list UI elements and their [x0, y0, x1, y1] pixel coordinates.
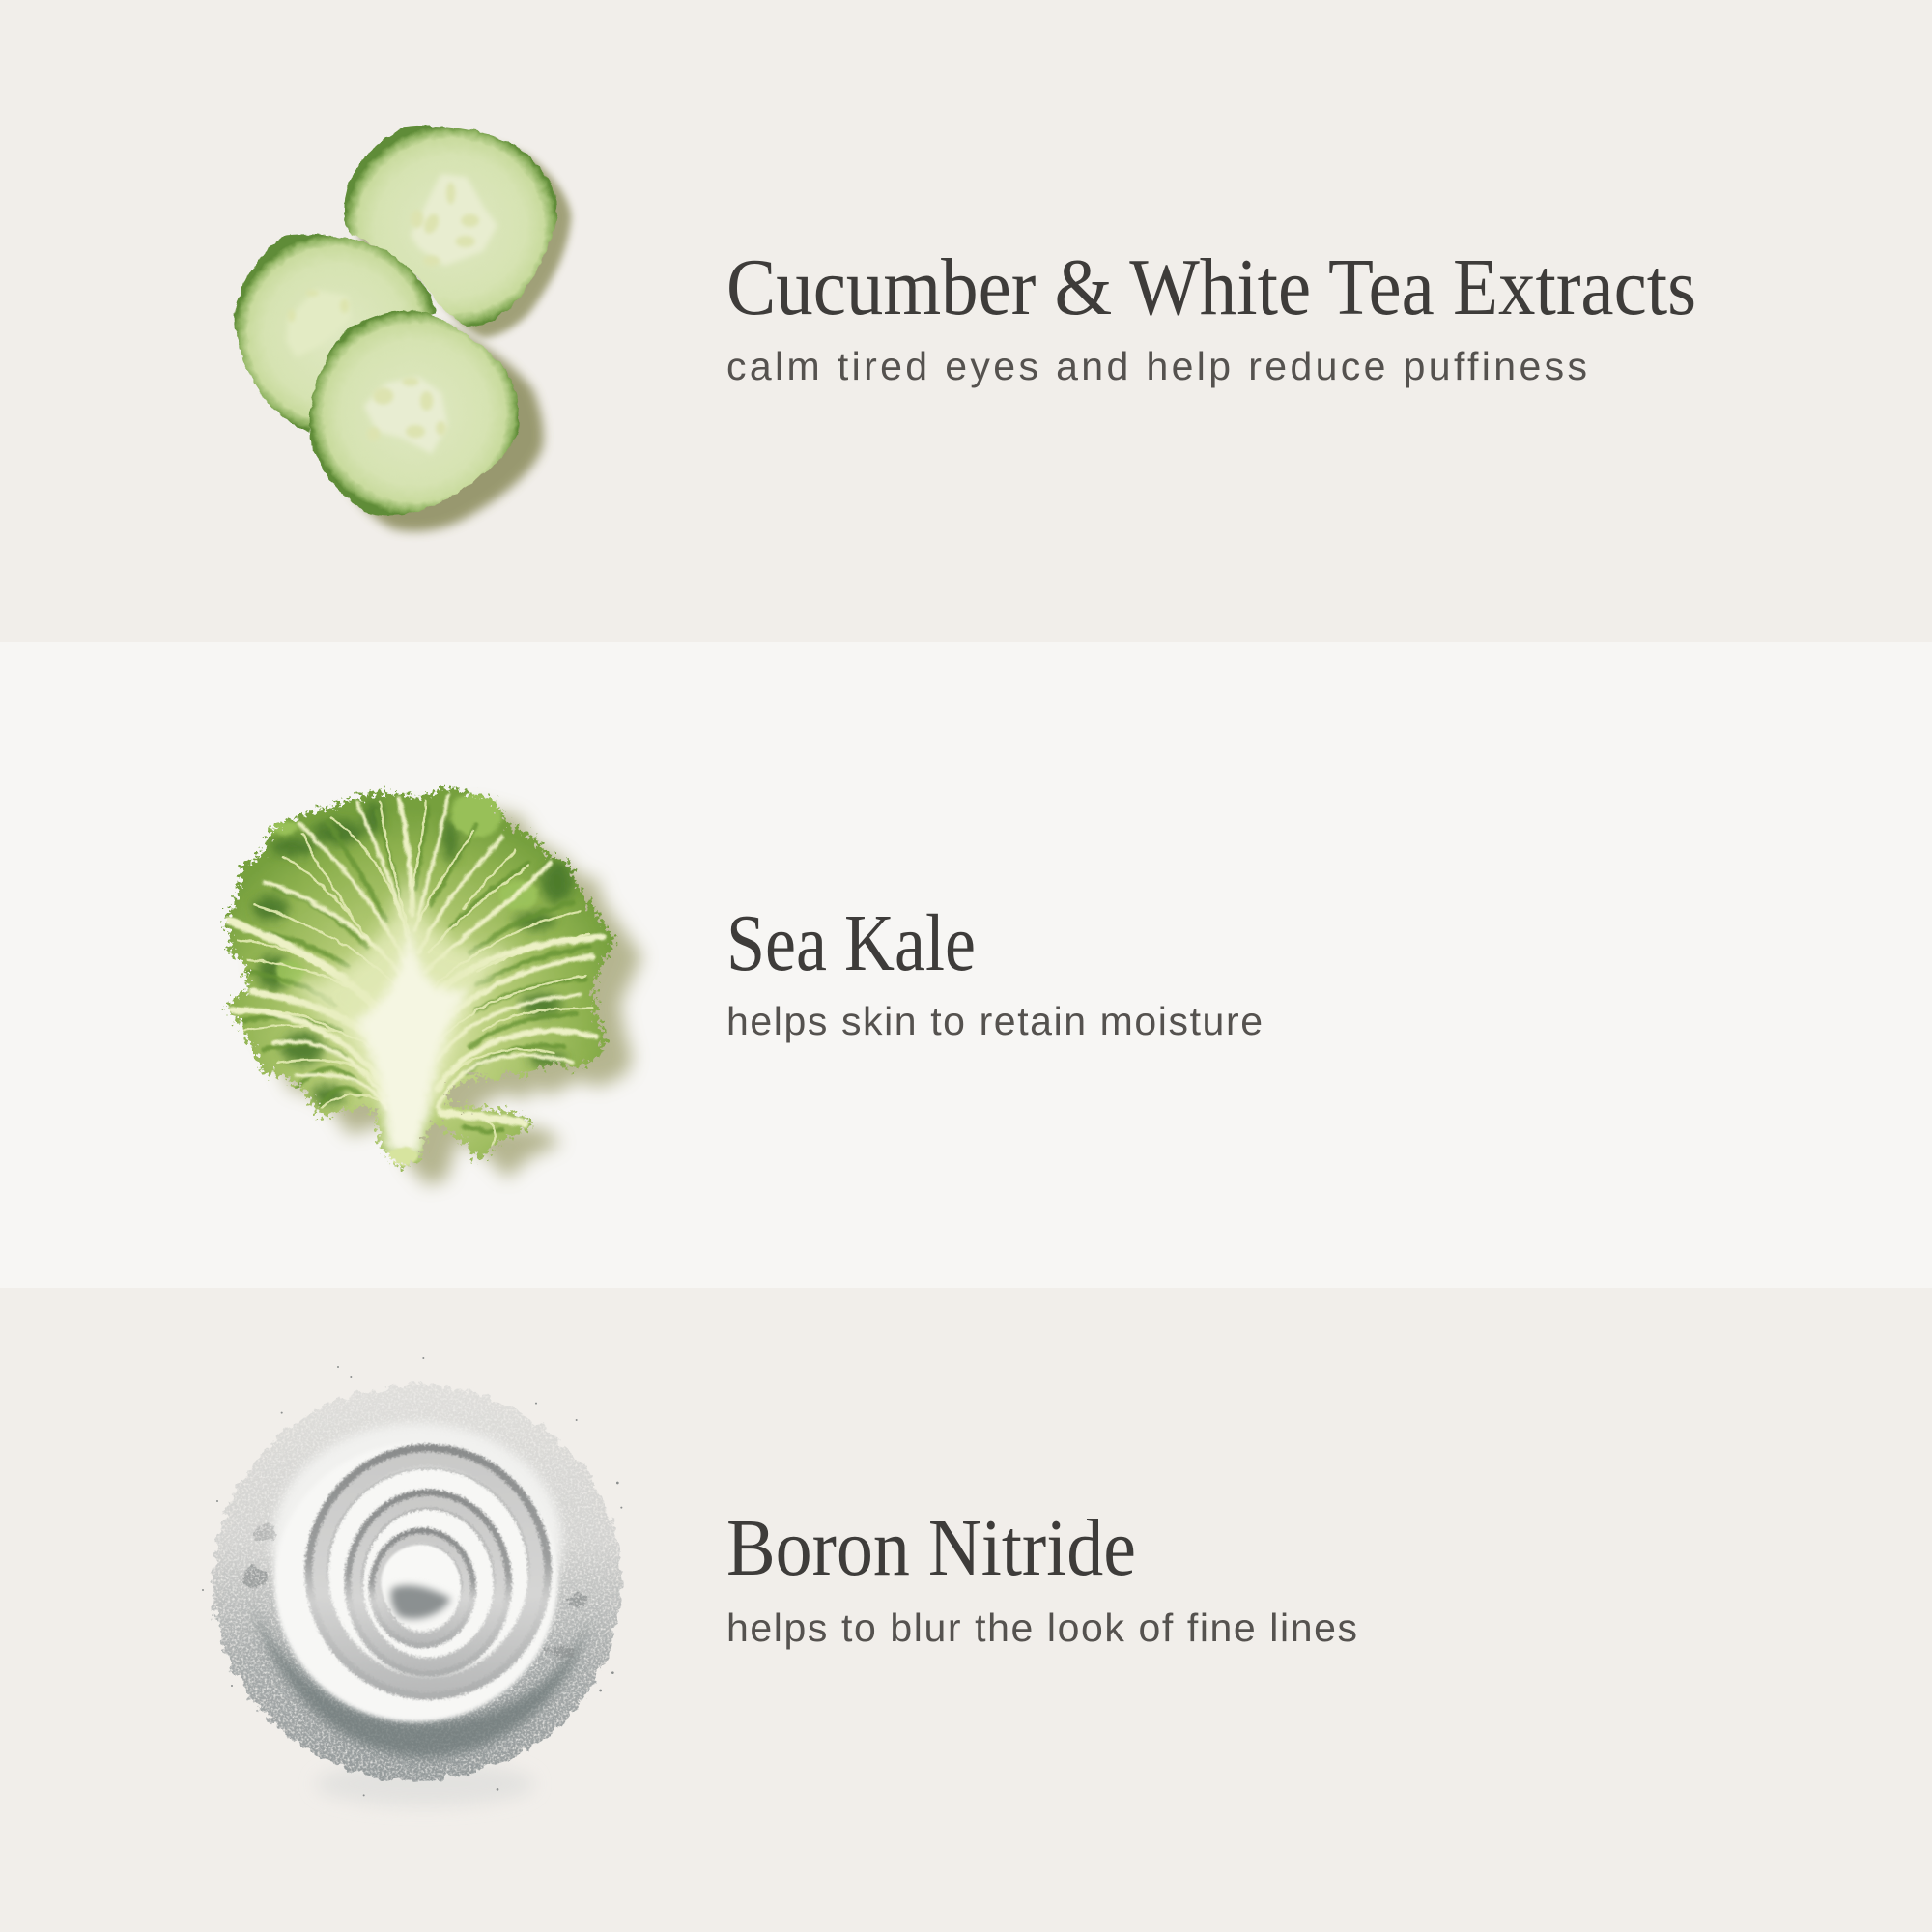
panel: sea kale [0, 642, 1932, 1288]
concentric ripples [308, 1448, 548, 1696]
smooth inner plate [272, 1423, 562, 1721]
seeds: middle slice [287, 290, 351, 357]
fine veins [239, 802, 592, 1147]
text: benefit: calm tired eyes and help reduce puffiness [726, 344, 1587, 388]
heading: Boron Nitride: Boron Nitride [726, 1503, 1136, 1593]
specks [202, 1357, 622, 1796]
outer ripple [308, 1448, 548, 1696]
shadow crescent [251, 1601, 589, 1758]
heading: Sea Kale: Sea Kale [726, 898, 976, 988]
panel background [0, 0, 1932, 642]
middle ripple [348, 1492, 509, 1674]
icon: kale leaf [220, 784, 651, 1194]
panel: cucumber and white tea [0, 0, 1932, 642]
seeds: bottom slice [364, 377, 447, 454]
center mound [381, 1545, 460, 1621]
icon: boron nitride powder [202, 1357, 622, 1806]
text: benefit: helps to blur the look of fine lines [726, 1605, 1357, 1650]
powder disc [224, 1393, 611, 1773]
text: benefit: helps skin to retain moisture [726, 999, 1263, 1043]
icon: cucumber slices [235, 126, 571, 531]
clumps [242, 1523, 585, 1659]
panel background [0, 642, 1932, 1288]
dark leaf patches [253, 800, 573, 1104]
central rib [290, 869, 515, 1108]
panel: boron nitride [0, 1288, 1932, 1932]
seeds: top slice [411, 174, 497, 266]
panel background [0, 1288, 1932, 1932]
heading: Cucumber & White Tea Extracts: Cucumber & White Tea Extracts [726, 242, 1696, 332]
main veins [229, 795, 602, 1123]
frilled light edges [268, 792, 538, 985]
inner ripple [372, 1531, 473, 1645]
green bands between veins [244, 809, 589, 1131]
